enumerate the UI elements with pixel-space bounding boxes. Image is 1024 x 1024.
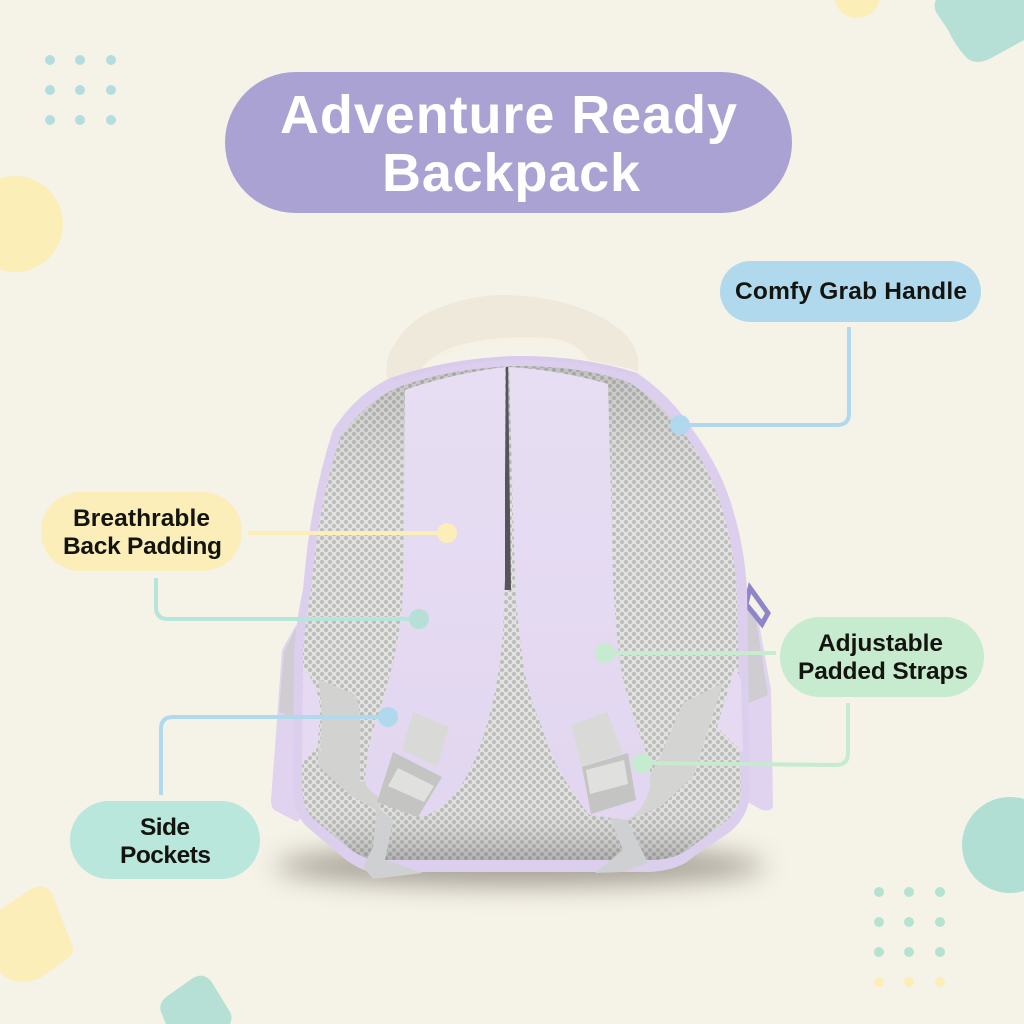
- label: comfy grab handle: [720, 261, 981, 322]
- ground shadow: [275, 846, 765, 886]
- connector: breathable padding top: [248, 523, 457, 543]
- connector: comfy grab handle: [670, 327, 849, 435]
- connector: adjustable straps bottom: [632, 703, 848, 773]
- label: adjustable padded straps: [780, 617, 984, 697]
- grab handle: [387, 295, 638, 380]
- side pocket left: [271, 625, 310, 822]
- label: adjustable padded straps: Padded Straps: [798, 658, 968, 685]
- side pocket right: [730, 600, 773, 810]
- left shoulder strap: [365, 367, 505, 817]
- bottom trim: [385, 862, 650, 872]
- right webbing tab: [571, 712, 623, 767]
- body shell: [293, 356, 750, 872]
- label: breathable back padding: Breathrable: [73, 505, 210, 532]
- dot grid bottom right: [874, 887, 945, 987]
- connector: side pockets: [161, 707, 398, 795]
- label: breathable back padding: Back Padding: [63, 533, 222, 560]
- center gap: [504, 367, 511, 590]
- right buckle: [582, 753, 636, 814]
- lower webbing right: [628, 683, 723, 820]
- label: side pockets: Pockets: [120, 842, 211, 869]
- connector: breathable padding bottom: [156, 578, 429, 629]
- label: comfy grab handle: Comfy Grab Handle: [735, 278, 967, 305]
- strap rim highlight: [392, 358, 636, 380]
- backpack illustration: [271, 295, 773, 886]
- title: Backpack: [382, 143, 641, 203]
- title: [225, 72, 792, 213]
- bottom webbing left: [363, 807, 423, 879]
- left buckle: [377, 752, 442, 817]
- label: adjustable padded straps: Adjustable: [818, 630, 943, 657]
- label: breathable back padding: [41, 492, 242, 571]
- dot grid top left: [45, 55, 116, 125]
- connector: adjustable straps top: [595, 643, 776, 663]
- title: Adventure Ready: [280, 85, 737, 145]
- label: side pockets: Side: [140, 814, 190, 841]
- mesh shading: [302, 366, 741, 860]
- side buckle: [746, 588, 768, 624]
- left webbing tab: [402, 712, 449, 767]
- lilac corner right: [717, 667, 743, 753]
- lilac corner left: [302, 667, 320, 762]
- label: side pockets: [70, 801, 260, 879]
- right shoulder strap: [509, 367, 650, 820]
- back mesh panel: [302, 366, 741, 860]
- lower webbing left: [318, 679, 378, 808]
- bottom webbing right: [595, 818, 648, 873]
